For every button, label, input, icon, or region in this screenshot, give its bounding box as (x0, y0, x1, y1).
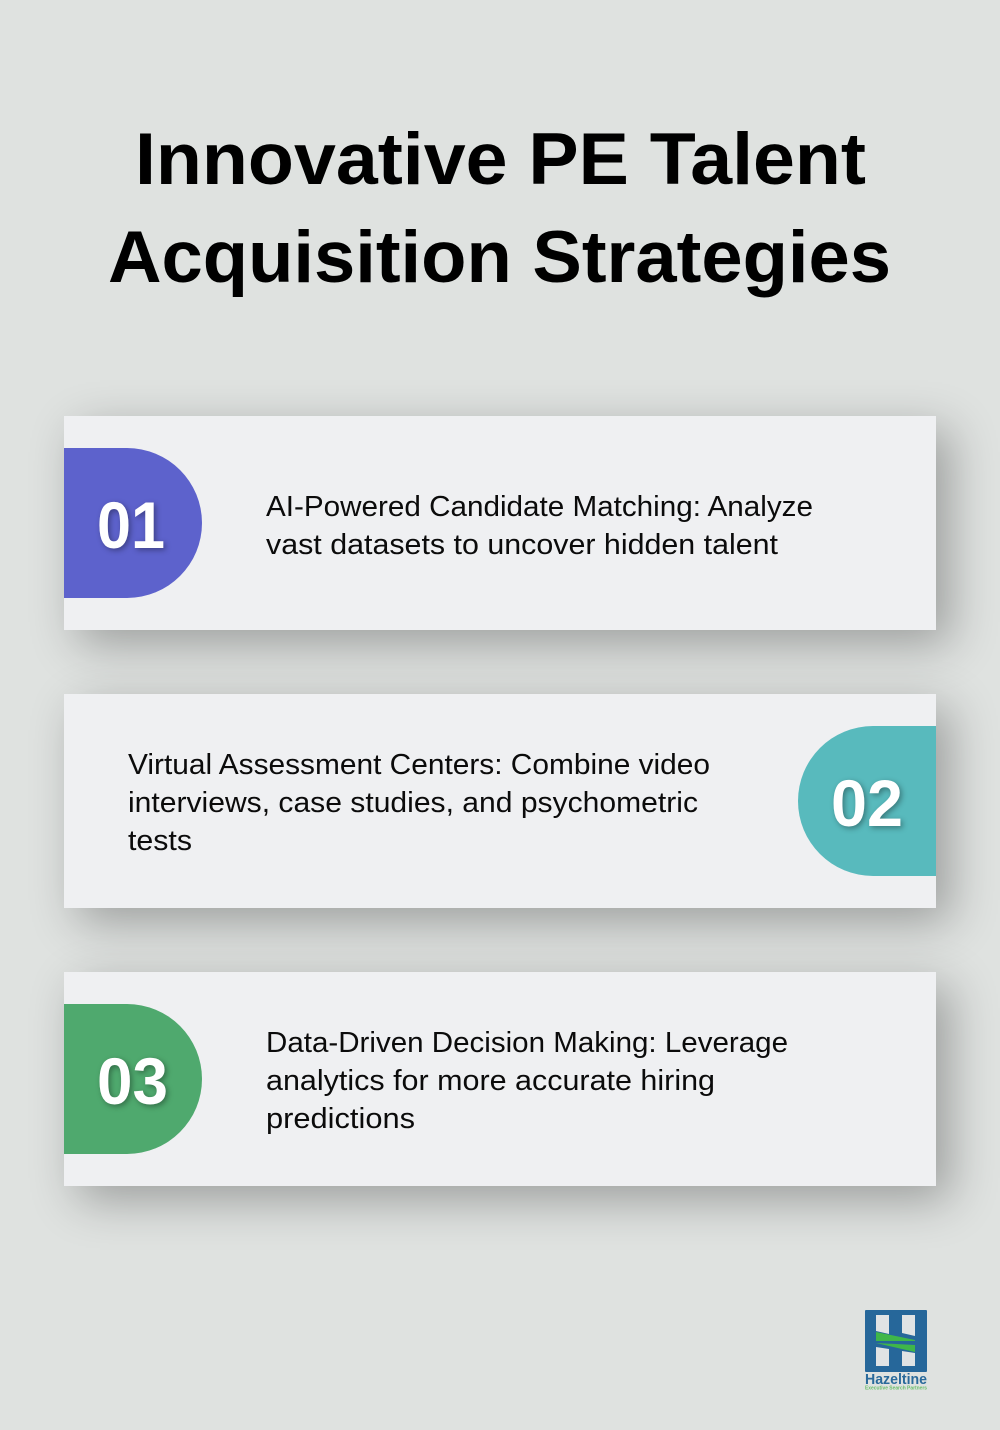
logo: Hazeltine: Executive Search Partners (865, 1386, 927, 1392)
text: data-driven decision making (266, 1027, 788, 1135)
text: data-driven decision making: analytics for more accurate hiring (266, 1065, 715, 1097)
text: AI-powered candidate matching: vast datasets to uncover hidden talent (266, 529, 778, 561)
logo: Hazeltine: Hazeltine (865, 1372, 927, 1388)
badge: 02: 02 (831, 766, 903, 840)
text: virtual assessment centers: Virtual Assessment Centers: Combine video (128, 749, 710, 781)
badge: 01 (64, 448, 202, 598)
title: Innovative PE Talent (135, 119, 866, 200)
badge: 03: 03 (97, 1044, 168, 1118)
badge: 03 (64, 1004, 202, 1154)
title: Acquisition Strategies (108, 217, 891, 298)
title (108, 119, 891, 298)
text: virtual assessment centers: interviews, case studies, and psychometric (128, 787, 698, 819)
badge: 02 (798, 726, 936, 876)
badge: 01: 01 (97, 488, 165, 562)
text: data-driven decision making: Data-Driven Decision Making: Leverage (266, 1027, 788, 1059)
text: virtual assessment centers (128, 749, 710, 857)
text: AI-powered candidate matching (266, 491, 813, 561)
panel: step 02 (64, 694, 936, 908)
logo: Hazeltine (865, 1310, 927, 1392)
text: virtual assessment centers: tests (128, 825, 192, 857)
panel: step 03 (64, 972, 936, 1186)
text: data-driven decision making: predictions (266, 1103, 415, 1135)
text: AI-powered candidate matching: AI-Powered Candidate Matching: Analyze (266, 491, 813, 523)
panel: step 01 (64, 416, 936, 630)
